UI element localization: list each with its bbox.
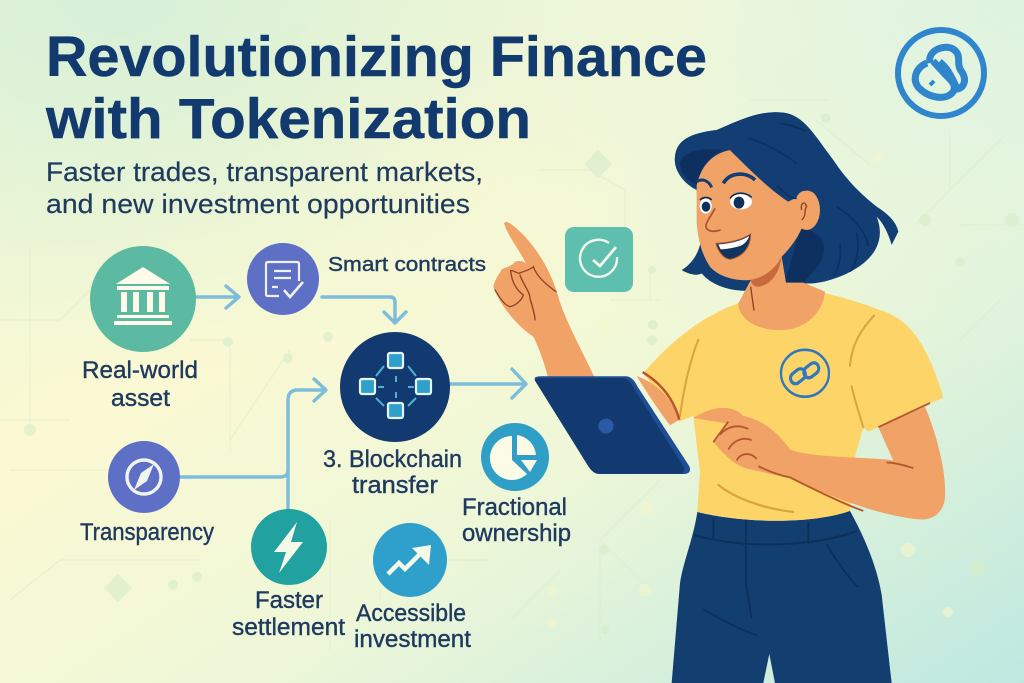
subtitle: and new investment opportunities xyxy=(46,189,470,219)
benefit: faster settlement xyxy=(232,509,345,641)
title xyxy=(45,25,707,151)
step: blockchain transfer xyxy=(323,332,462,499)
arrow: transparency and settlement to blockchain xyxy=(180,379,326,510)
right arm and pointing hand xyxy=(693,403,945,519)
benefit: accessible investment xyxy=(354,523,471,653)
label: Accessible xyxy=(356,600,466,627)
icon: check badge xyxy=(565,227,633,292)
shirt logo xyxy=(781,350,829,397)
benefit: fractional ownership xyxy=(462,423,571,547)
nose xyxy=(706,208,721,231)
label: ownership xyxy=(462,520,571,547)
label xyxy=(232,587,345,641)
raised arm and pointing hand xyxy=(493,222,595,378)
connector arrows xyxy=(180,286,526,510)
ear xyxy=(793,190,820,230)
neck xyxy=(738,257,825,330)
subtitle xyxy=(46,157,483,219)
label: investment xyxy=(354,626,471,653)
icon: lightning bolt xyxy=(251,509,327,585)
arrow: asset to smart contracts xyxy=(196,286,239,308)
step: real-world asset xyxy=(82,246,198,412)
face xyxy=(697,150,802,280)
head xyxy=(675,112,833,330)
icon: blockchain network xyxy=(340,332,450,442)
pants xyxy=(672,511,892,683)
tablet xyxy=(535,376,690,474)
label: Fractional xyxy=(462,494,567,521)
label: asset xyxy=(111,385,170,412)
step: smart contracts xyxy=(247,243,486,315)
mouth xyxy=(716,234,751,259)
label: 3. Blockchain xyxy=(323,446,462,473)
shirt xyxy=(643,293,943,521)
icon: growth arrow xyxy=(373,523,447,597)
label xyxy=(354,600,471,653)
benefit: transparency xyxy=(80,441,214,546)
label: settlement xyxy=(232,614,345,641)
icon: pie chart xyxy=(481,423,549,491)
eyes and brows xyxy=(700,198,712,214)
logo xyxy=(898,30,984,116)
upper left arm xyxy=(637,372,679,425)
label: transfer xyxy=(352,472,438,499)
icon: compass xyxy=(108,441,180,513)
label xyxy=(323,446,462,499)
label: Transparency xyxy=(80,519,214,546)
hair back xyxy=(675,112,898,291)
subtitle: Faster trades, transparent markets, xyxy=(46,157,483,187)
label xyxy=(82,357,198,412)
icon: contract xyxy=(247,243,319,315)
label: Faster xyxy=(255,587,323,614)
label: Smart contracts xyxy=(328,254,486,276)
title: with Tokenization xyxy=(45,87,531,151)
jaw shadow xyxy=(751,257,782,287)
label: Real-world xyxy=(82,357,198,384)
arrow: blockchain to tablet xyxy=(450,369,526,398)
label xyxy=(462,494,571,547)
hair fringe xyxy=(675,112,833,202)
icon: bank xyxy=(90,246,196,352)
illustration: woman with tablet xyxy=(493,112,945,683)
title: Revolutionizing Finance xyxy=(46,25,707,89)
arrow: smart contracts to blockchain xyxy=(322,297,406,323)
